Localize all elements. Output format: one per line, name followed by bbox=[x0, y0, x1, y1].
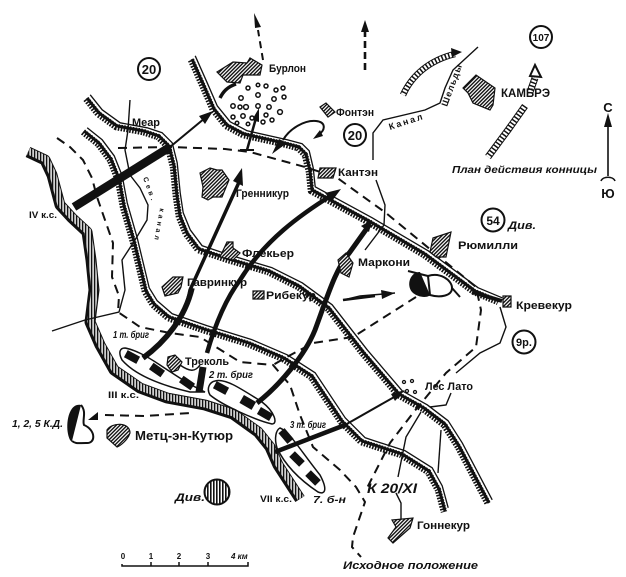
Lateau wood marks bbox=[402, 380, 416, 394]
scale bar bbox=[121, 552, 248, 566]
canal and stream thin lines bbox=[52, 47, 506, 520]
village: Havrincourt bbox=[162, 277, 183, 296]
italic labels: 3 т. бриг bbox=[290, 419, 327, 431]
place labels: Кантэн bbox=[338, 167, 378, 179]
place labels: Фонтэн bbox=[336, 107, 374, 119]
village: Ribécourt bbox=[253, 291, 264, 299]
circled number: 107 bbox=[530, 26, 552, 48]
italic labels: 2 т. бриг bbox=[208, 369, 254, 381]
arrow: Gavrincourt to Graincourt bbox=[143, 168, 243, 358]
circled number: 20 east: 20 bbox=[348, 128, 362, 143]
German trench line: outer bbox=[86, 95, 492, 504]
place labels: Рибекур bbox=[266, 290, 316, 302]
unit labels bbox=[29, 210, 292, 504]
scale bar: 2 bbox=[177, 552, 182, 561]
north canal label lower: канал bbox=[152, 208, 165, 243]
village: Gonnelieu bbox=[388, 518, 413, 543]
place labels: Бурлон bbox=[269, 63, 306, 75]
circled number: 20 bbox=[138, 58, 160, 80]
cavalry ribbon arrow: canal bbox=[403, 48, 462, 95]
arrow into Bourlon wood bbox=[240, 108, 259, 150]
place labels: Меар bbox=[132, 117, 160, 129]
italic labels: План действия конницы bbox=[452, 165, 598, 176]
scale bar: 1 bbox=[149, 552, 154, 561]
north canal label: Сев. bbox=[141, 176, 157, 204]
village: Cantaing bbox=[318, 168, 336, 178]
arrow: Trescault towards Cantaing bbox=[207, 189, 341, 353]
tank bar near Trescault bbox=[199, 367, 203, 392]
village: Crèvecoeur bbox=[503, 296, 511, 307]
scale bar: 3 bbox=[206, 552, 211, 561]
scale bar: 0 bbox=[121, 552, 126, 561]
village: Graincourt bbox=[200, 168, 229, 200]
short thick arrow to Bourlon bbox=[220, 84, 236, 98]
village: Metz-en-Couture bbox=[107, 424, 130, 447]
place labels bbox=[132, 63, 572, 532]
compass: С bbox=[603, 100, 613, 115]
tanks bbox=[124, 350, 321, 486]
village: Bourlon bbox=[217, 58, 262, 83]
place labels: Лес Лато bbox=[425, 381, 473, 393]
scale bar: 4 км bbox=[230, 552, 248, 561]
place labels: Треколь bbox=[185, 356, 229, 368]
italic labels: 7. б-н bbox=[313, 494, 346, 506]
villages: hatched settlements bbox=[107, 58, 511, 543]
unit labels: VII к.с. bbox=[260, 494, 292, 504]
italic labels: 1 т. бриг bbox=[113, 329, 150, 341]
village: Cambrai bbox=[463, 75, 495, 110]
compass: Ю bbox=[601, 186, 615, 201]
circled number: 9p: 9р. bbox=[516, 337, 532, 349]
German trench line: inner bbox=[83, 128, 448, 512]
place labels: Флекьер bbox=[242, 248, 294, 260]
blob: cavalry divisions 1,2,5 bbox=[67, 405, 98, 443]
village: Rumilly bbox=[430, 232, 451, 257]
place labels: Гавринкур bbox=[187, 277, 247, 289]
arrow: 3rd brigade to Lateau wood bbox=[275, 390, 405, 452]
British front line band bbox=[28, 151, 301, 499]
Bourlon wood bbox=[231, 83, 286, 126]
circled number: 20: 20 bbox=[142, 62, 156, 77]
circled number: 54: 54 bbox=[486, 214, 500, 228]
italic labels: 1, 2, 5 К.Д. bbox=[12, 419, 63, 430]
place labels: Гренникур bbox=[236, 188, 289, 200]
cavalry ribbon arrow: Cambrai plan bbox=[488, 65, 541, 157]
tank brigade outlines bbox=[120, 348, 325, 493]
village: Flesquières bbox=[220, 242, 240, 260]
unit labels: III к.с. bbox=[108, 390, 139, 400]
italic labels bbox=[12, 165, 598, 572]
village: Marcoing bbox=[338, 253, 353, 277]
village: Trescault bbox=[167, 355, 182, 372]
circled number: 54 bbox=[482, 208, 504, 232]
dashed arrow north of Bourlon bbox=[254, 13, 263, 60]
place labels: Кревекур bbox=[516, 300, 572, 312]
thick arrow: IV corps bbox=[74, 111, 213, 207]
place labels: КАМБРЭ bbox=[501, 86, 550, 100]
italic labels: К 20/XI bbox=[367, 480, 418, 496]
curved arrow round Fontaine bbox=[283, 121, 324, 140]
place labels: Метц-эн-Кутюр bbox=[135, 428, 233, 443]
italic labels: Исходное положение bbox=[343, 560, 478, 572]
canal label: Канал bbox=[388, 111, 426, 132]
italic labels: Див. bbox=[174, 492, 205, 504]
canal name vertical label: Шельды bbox=[439, 62, 464, 108]
short thick wedge bbox=[272, 139, 287, 154]
dashed arrow north centre bbox=[361, 20, 369, 70]
unit labels: IV к.с. bbox=[29, 210, 57, 220]
place labels: Рюмилли bbox=[458, 240, 518, 252]
circled number: 20 east bbox=[344, 124, 366, 146]
village: Fontaine bbox=[320, 103, 335, 117]
place labels: Гоннекур bbox=[417, 520, 470, 532]
italic labels: Див. bbox=[507, 220, 536, 232]
arrow: to Marcoing bbox=[257, 220, 372, 403]
German trench line: upper right bbox=[191, 56, 502, 302]
arrow: to Masnières bbox=[343, 290, 395, 300]
compass bbox=[601, 100, 615, 201]
circled number: 107: 107 bbox=[533, 33, 550, 44]
blob: cavalry at Masnières bbox=[408, 271, 460, 297]
circled number: 9p bbox=[512, 330, 536, 354]
division circle bbox=[204, 480, 230, 504]
dashed line: jump-off and objectives bbox=[57, 138, 481, 557]
place labels: Маркони bbox=[358, 257, 410, 269]
